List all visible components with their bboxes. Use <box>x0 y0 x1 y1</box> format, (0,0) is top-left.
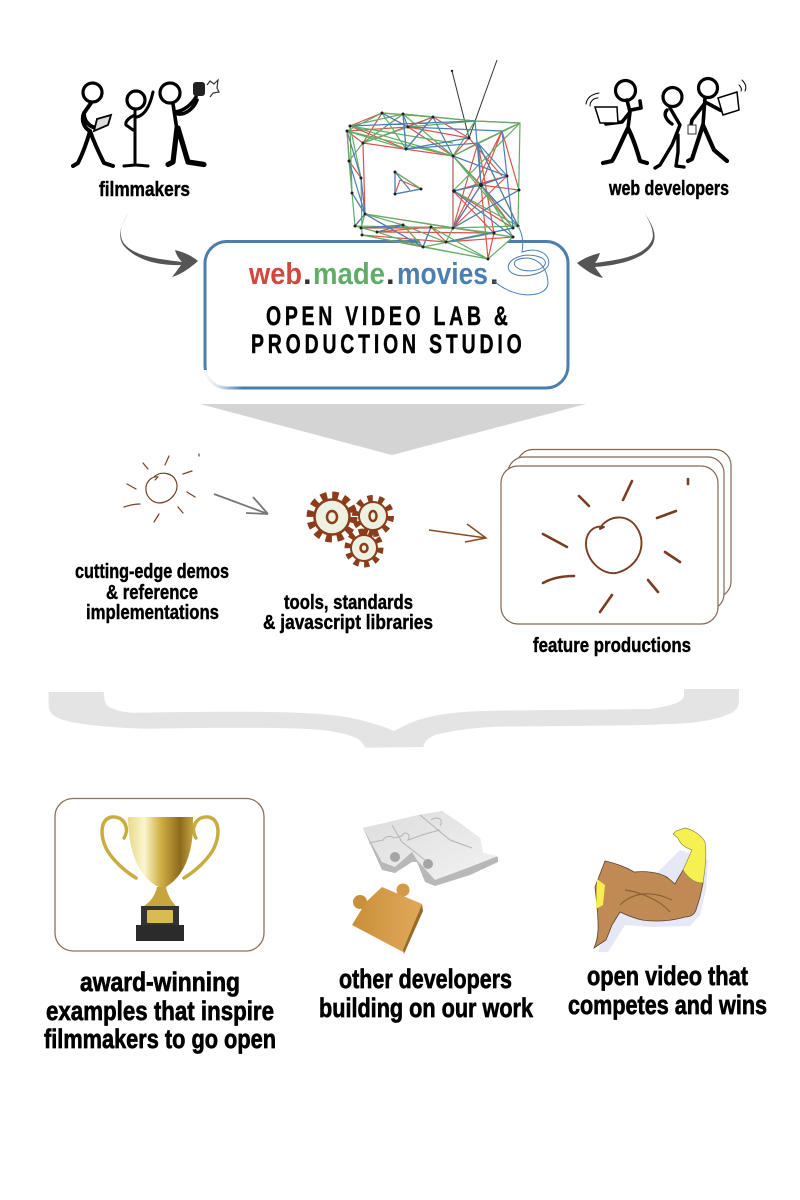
icon: orange puzzle piece <box>352 884 423 954</box>
power cord <box>494 226 549 295</box>
icon: developer stick figures <box>586 78 746 168</box>
arrow: web developers into studio <box>577 210 655 278</box>
label: web developers: web developers <box>608 178 729 200</box>
arrow: filmmakers into studio <box>120 209 198 277</box>
logo: web.made.movies.: . <box>303 256 312 291</box>
caption line 3: filmmakers to go open <box>44 1024 276 1054</box>
logo: web.made.movies.: web <box>248 256 302 291</box>
caption line 2: building on our work <box>319 993 534 1023</box>
antenna <box>452 60 497 138</box>
icon: grey puzzle <box>363 811 498 886</box>
group: demos <box>75 454 229 624</box>
caption line 1: open video that <box>587 961 748 991</box>
logo: web.made.movies.: made <box>313 256 385 291</box>
icon: tablet <box>94 115 111 131</box>
label: implementations: implementations <box>86 602 219 624</box>
stacked cards <box>501 450 731 624</box>
icon: filmmaker stick figures <box>73 80 219 166</box>
group: other developers <box>319 811 534 1023</box>
icon: note <box>688 125 696 134</box>
curly brace <box>49 689 739 748</box>
panel border <box>202 242 568 391</box>
window edge shade <box>452 156 454 228</box>
funnel arrow <box>200 404 586 455</box>
label: feature productions: feature productions <box>533 635 691 657</box>
icon: trophy <box>102 817 218 941</box>
caption line 1: award-winning <box>80 967 240 997</box>
logo: web.made.movies.: . <box>386 256 395 291</box>
logo: web.made.movies.: . <box>490 256 499 291</box>
icon: laptop right <box>718 92 739 115</box>
label: and reference: & reference <box>106 582 198 604</box>
label: tools, standards: tools, standards <box>284 592 413 614</box>
logo: web.made.movies. <box>248 256 499 291</box>
arrow: tools to features <box>429 524 486 542</box>
group: tools <box>263 496 433 634</box>
icon: camera and flash <box>193 80 219 97</box>
group: award-winning <box>44 798 276 1054</box>
group: open video wins <box>568 828 767 1020</box>
icon: laptop left <box>595 107 618 123</box>
card frame <box>55 798 264 951</box>
caption line 1: other developers <box>339 964 512 994</box>
panel: open video lab <box>202 242 568 391</box>
label: cutting-edge demos: cutting-edge demos <box>75 561 229 583</box>
icon: flexed arm <box>594 828 708 952</box>
tv backing <box>347 113 520 259</box>
red mesh <box>347 113 520 259</box>
icon: small sun sketch <box>124 454 199 522</box>
group: filmmakers <box>73 80 219 201</box>
icon: gears <box>311 496 390 564</box>
green mesh <box>347 113 520 259</box>
icon: large sun sketch <box>543 479 688 612</box>
blue mesh <box>347 113 519 247</box>
group: feature productions <box>501 450 731 657</box>
arrow: demos to tools <box>214 494 268 514</box>
icon: wireframe television <box>346 60 549 295</box>
logo: web.made.movies.: movies <box>397 256 488 291</box>
caption line 2: examples that inspire <box>46 996 274 1026</box>
mesh nodes <box>346 70 520 260</box>
heading line 2: PRODUCTION STUDIO <box>251 329 522 359</box>
heading line 1: OPEN VIDEO LAB & <box>266 301 508 331</box>
label: filmmakers: filmmakers <box>99 179 190 201</box>
group: web developers <box>586 78 746 200</box>
label: and javascript libraries: & javascript libraries <box>263 612 433 634</box>
